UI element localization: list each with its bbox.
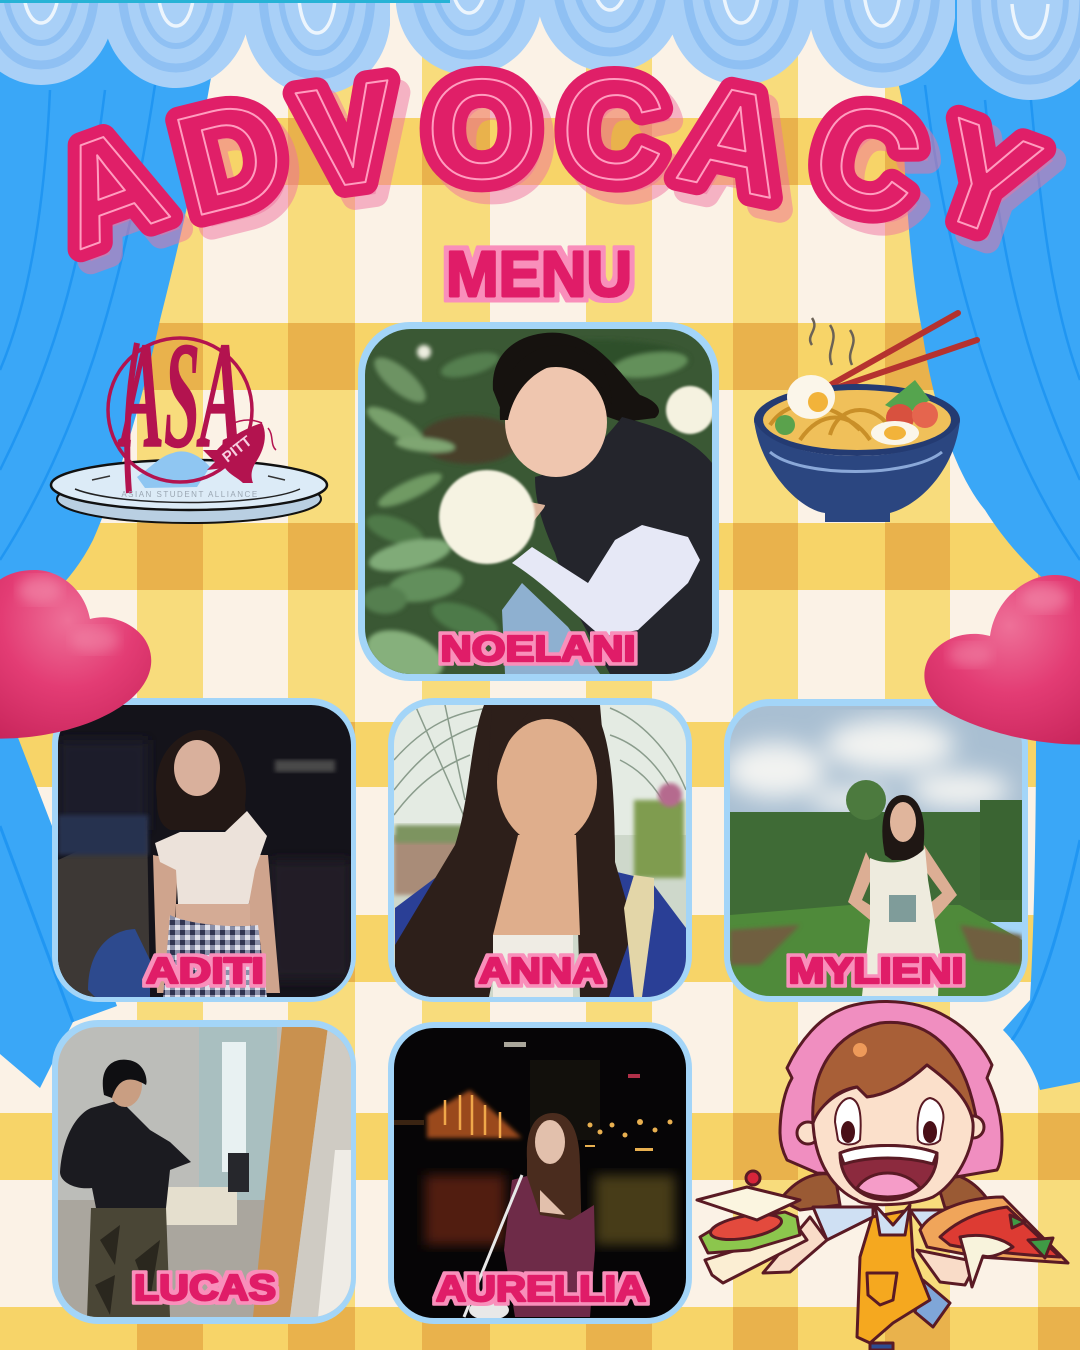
title highlight outline: C — [557, 47, 668, 212]
photo card: Lucas — [52, 1020, 356, 1324]
name: Aditi: ADITI — [146, 950, 264, 991]
icon: left heart — [0, 570, 151, 739]
character: chef with sandwich and pizza — [697, 1001, 1068, 1350]
title highlight outline: C — [797, 69, 937, 249]
photo card: Mylieni — [724, 699, 1028, 1002]
icon: right heart — [924, 575, 1080, 745]
chef mouth — [840, 1146, 937, 1200]
logo: ASA on plate: ASIAN STUDENT ALLIANCE — [121, 490, 259, 499]
title main letters: A — [33, 95, 184, 280]
photo card: Aditi — [52, 698, 356, 1002]
koi fish: PITT — [219, 433, 255, 466]
title highlight outline: Y — [912, 88, 1056, 270]
title highlight outline: O — [427, 50, 537, 209]
name: Anna: ANNA — [478, 950, 604, 991]
Noelani foliage — [360, 340, 690, 689]
icon: ramen bowl with chopsticks — [754, 313, 977, 522]
title main letters: A — [667, 52, 800, 229]
title main letters: O — [427, 50, 537, 209]
chef headscarf — [780, 1001, 1002, 1178]
photo card: Noelani — [358, 322, 719, 689]
name: Mylieni: MYLIENI — [788, 950, 964, 991]
photo card: Anna — [388, 698, 692, 1002]
sandwich — [697, 1171, 807, 1283]
left curtain — [0, 0, 225, 1088]
chef eyes — [835, 1098, 943, 1144]
chef ears — [797, 1122, 819, 1144]
title shadow letters: V — [300, 62, 416, 233]
chef face — [813, 1065, 973, 1205]
ASA circle and letters — [108, 311, 252, 493]
plate — [51, 460, 327, 523]
title highlight outline: A — [33, 95, 184, 280]
title shadow letters: D — [172, 80, 310, 259]
title: ADVOCACY — [33, 47, 1066, 292]
right curtain — [880, 0, 1080, 1090]
valance: scalloped top curtain — [0, 0, 1080, 100]
title shadow letters: Y — [922, 100, 1066, 282]
title main letters: C — [557, 47, 668, 212]
title highlight outline: A — [667, 52, 800, 229]
title main letters: D — [162, 68, 300, 247]
title main letters: V — [290, 50, 406, 221]
title main letters: Y — [912, 88, 1056, 270]
chef hair back — [780, 1174, 990, 1210]
chef arms — [813, 1207, 950, 1245]
title highlight outline: V — [290, 50, 406, 221]
title shadow letters: O — [437, 62, 547, 221]
logo: ASA on plate: ASA — [118, 311, 243, 479]
name: Noelani: NOELANI — [440, 628, 636, 669]
photo card: Aurellia — [388, 1022, 692, 1324]
bridge — [137, 451, 210, 488]
title highlight outline — [33, 47, 1056, 280]
name: Aurellia: AURELLIA — [436, 1268, 646, 1309]
Noelani figure — [493, 333, 659, 422]
chef hair — [813, 1022, 977, 1130]
title shadow letters — [43, 59, 1066, 292]
koi fish — [203, 420, 276, 483]
title main letters: C — [797, 69, 937, 249]
title shadow letters: A — [677, 64, 810, 241]
title shadow letters: C — [807, 81, 947, 261]
logo: ASA on plate — [51, 311, 327, 523]
chef legs and apron — [857, 1205, 950, 1350]
title shadow letters: A — [43, 107, 194, 292]
pizza slice — [920, 1197, 1068, 1287]
title highlight outline: D — [162, 68, 300, 247]
subtitle: MENU: MENU — [446, 238, 632, 310]
title main letters — [33, 47, 1056, 280]
title shadow letters: C — [567, 59, 678, 224]
name: Lucas: LUCAS — [134, 1267, 276, 1308]
